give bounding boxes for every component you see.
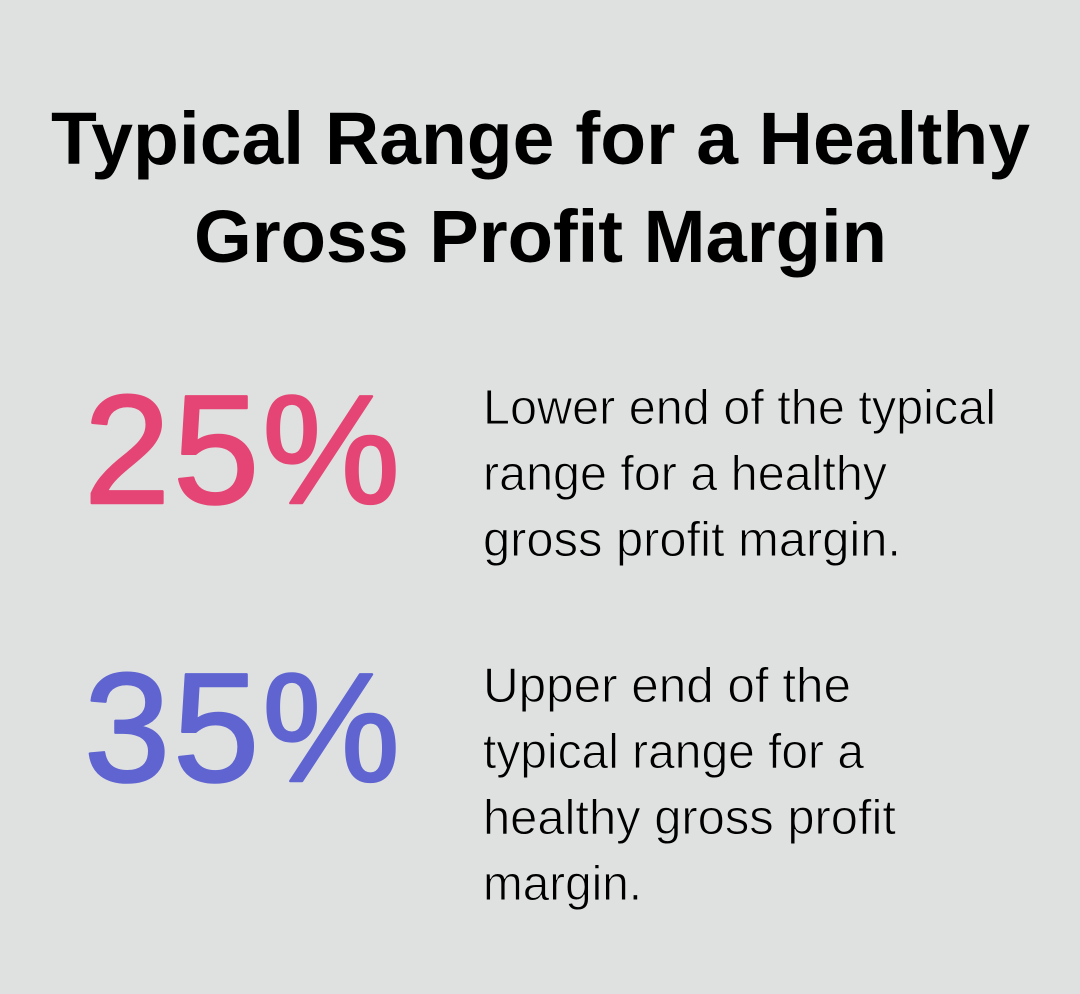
stat description upper end — [483, 659, 896, 911]
title — [51, 97, 1030, 278]
stat description upper end: Upper end of the — [483, 659, 851, 713]
stat description lower end: Lower end of the typical — [483, 381, 996, 435]
stat: 25% — [84, 363, 996, 567]
stat: 35% — [84, 641, 896, 911]
stat description lower end: gross profit margin. — [483, 513, 901, 567]
stat description upper end: typical range for a — [483, 725, 865, 779]
stat description lower end: range for a healthy — [483, 447, 887, 501]
stat value 25%: 25% — [84, 363, 400, 536]
stat description upper end: healthy gross profit — [483, 791, 896, 845]
stat value 35%: 35% — [84, 641, 400, 814]
title: Typical Range for a Healthy — [51, 97, 1030, 180]
title: Gross Profit Margin — [194, 195, 887, 278]
stat description lower end — [483, 381, 996, 567]
stat description upper end: margin. — [483, 857, 642, 911]
